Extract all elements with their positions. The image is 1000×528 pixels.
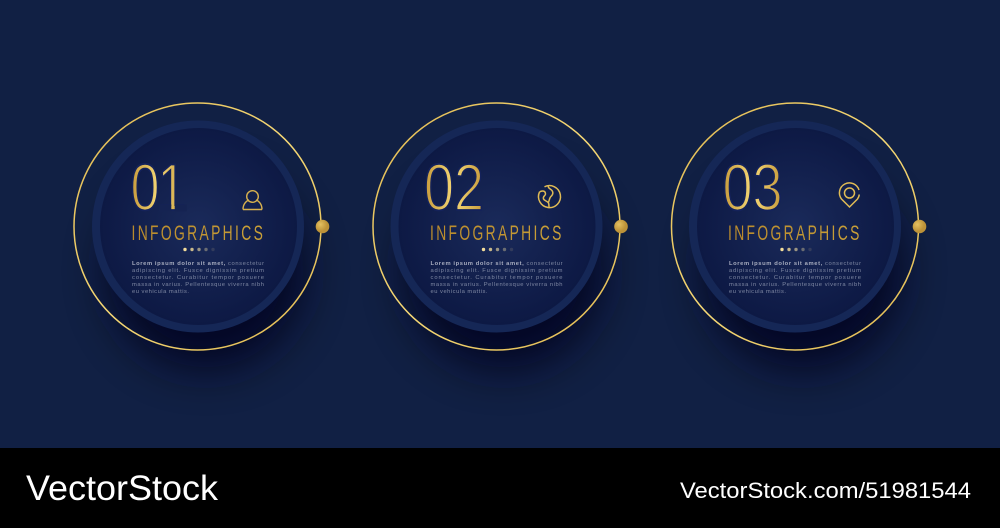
inner disc xyxy=(697,128,894,325)
body text: eu vehicula mattis. xyxy=(132,289,189,295)
body text: adipiscing elit. Fusce dignissim pretium xyxy=(132,268,264,274)
ring band xyxy=(390,120,602,332)
ring band xyxy=(92,120,304,332)
body text: eu vehicula mattis. xyxy=(729,289,786,295)
gold ring xyxy=(74,103,321,350)
drop shadow xyxy=(406,173,602,369)
inner disc xyxy=(100,128,297,325)
pagination dots xyxy=(183,248,215,251)
icon: person xyxy=(243,191,262,210)
gold ring xyxy=(672,103,918,350)
pagination dots xyxy=(482,248,513,251)
panel: step 02 xyxy=(373,103,628,369)
number 03: 03 xyxy=(722,150,782,224)
gold connector dot xyxy=(316,220,329,233)
body text xyxy=(132,261,264,295)
heading: INFOGRAPHICS xyxy=(728,221,859,245)
body text: Lorem ipsum dolor sit amet, consectetur xyxy=(729,261,861,267)
body text: eu vehicula mattis. xyxy=(430,289,488,295)
body text: consectetur. Curabitur tempor posuere xyxy=(729,275,861,281)
ring band xyxy=(689,120,901,332)
footer logo: VectorStock xyxy=(26,469,219,508)
body text: adipiscing elit. Fusce dignissim pretium xyxy=(430,268,563,274)
body text: massa in varius. Pellentesque viverra nibh xyxy=(729,282,861,288)
drop shadow xyxy=(705,173,901,369)
icon: globe xyxy=(538,186,560,208)
body text: Lorem ipsum dolor sit amet, consectetur xyxy=(430,261,563,267)
body text: consectetur. Curabitur tempor posuere xyxy=(132,275,264,281)
body text xyxy=(729,261,861,295)
panel: step 03 xyxy=(672,103,926,369)
gold connector dot xyxy=(614,220,628,233)
number 01: 01 xyxy=(130,150,186,224)
body text: massa in varius. Pellentesque viverra nibh xyxy=(430,282,562,288)
footer bar xyxy=(0,448,1000,528)
footer id: VectorStock.com/51981544 xyxy=(680,478,971,503)
body text: consectetur. Curabitur tempor posuere xyxy=(430,275,562,281)
body text: massa in varius. Pellentesque viverra nibh xyxy=(132,282,264,288)
body text: Lorem ipsum dolor sit amet, consectetur xyxy=(132,261,264,267)
gold ring xyxy=(373,103,620,350)
drop shadow xyxy=(108,173,304,369)
number 02: 02 xyxy=(424,150,484,224)
body text: adipiscing elit. Fusce dignissim pretium xyxy=(729,268,861,274)
icon: map pin xyxy=(839,183,859,207)
panel: step 01 xyxy=(74,103,329,369)
heading: INFOGRAPHICS xyxy=(132,221,263,245)
pagination dots xyxy=(780,248,812,251)
heading: INFOGRAPHICS xyxy=(430,221,561,245)
body text xyxy=(430,261,563,295)
gold connector dot xyxy=(913,220,926,233)
inner disc xyxy=(398,128,596,325)
